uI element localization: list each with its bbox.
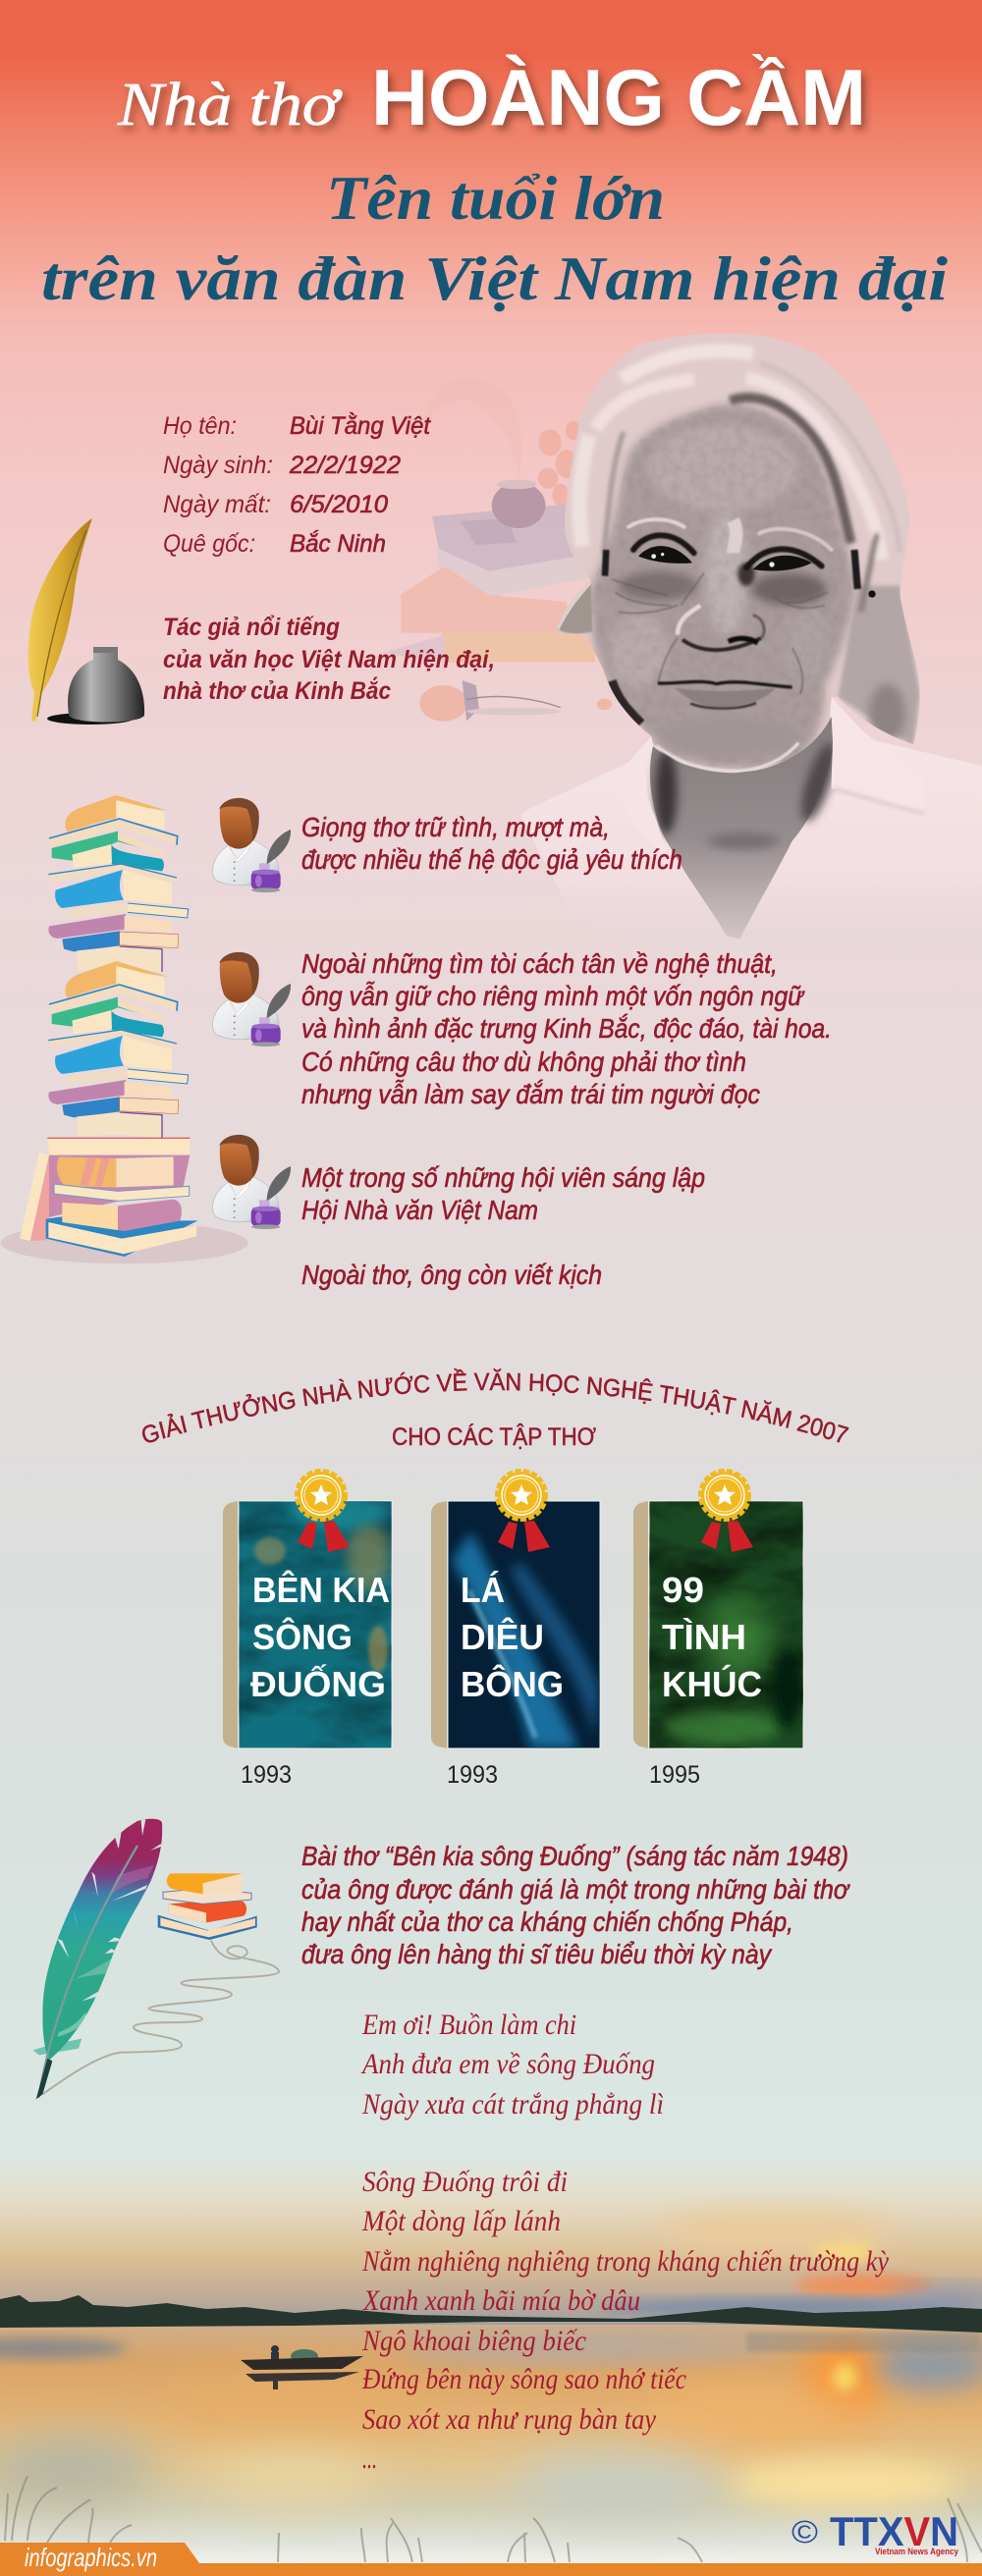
biography facts [163, 411, 431, 558]
title: HOÀNG CẦM [371, 53, 866, 142]
icon: writer 1 [212, 798, 291, 892]
collar [619, 699, 925, 854]
publication years: 1993 [241, 1761, 292, 1789]
TTXVN logo: TTXVN [830, 2508, 958, 2554]
footer bar with site tab: infographics.vn [25, 2543, 157, 2572]
beard and chin [612, 680, 798, 771]
squiggle line [42, 1941, 279, 2094]
publication years [241, 1761, 700, 1789]
text: artistic innovation: Ngoài những tìm tòi cách tân về nghệ thuật, [301, 948, 778, 979]
mouth [658, 681, 792, 709]
biography facts: Ngày sinh: [163, 452, 273, 479]
book: Lá diêu bông: LÁ [461, 1570, 505, 1610]
subtitle: Tên tuổi lớn [326, 163, 665, 233]
sunset lake photo [0, 2150, 982, 2576]
paragraph about the poem: của ông được đánh giá là một trong những bài thơ [301, 1874, 850, 1905]
book: Bên kia sông Đuống: ĐUỐNG [250, 1663, 386, 1704]
poem excerpt [360, 2009, 890, 2475]
ear [558, 582, 592, 633]
feather [32, 1816, 170, 2099]
icon: writer 2 [212, 952, 291, 1046]
biography facts: 22/2/1922 [289, 452, 401, 479]
poem excerpt: Một dòng lấp lánh [361, 2205, 561, 2237]
paragraph about the poem [301, 1841, 850, 1969]
illustration: tall pile of books [1, 795, 248, 1263]
text: founding member and playwright: Một trong số những hội viên sáng lập [301, 1162, 705, 1193]
book: Bên kia sông Đuống: BÊN KIA [252, 1569, 390, 1610]
tagline [163, 614, 495, 705]
poem excerpt: Anh đưa em về sông Đuống [360, 2048, 655, 2080]
text: founding member and playwright: Ngoài thơ, ông còn viết kịch [301, 1260, 602, 1290]
book: Lá diêu bông [431, 1501, 600, 1748]
tagline: nhà thơ của Kinh Bắc [163, 676, 391, 705]
title: Nhà thơ [117, 72, 343, 138]
paragraph about the poem: đưa ông lên hàng thi sĩ tiêu biểu thời kỳ này [301, 1939, 773, 1969]
TTXVN logo: © [791, 2514, 818, 2549]
tree line [0, 2295, 982, 2333]
poem excerpt: Em ơi! Buồn làm chi [361, 2009, 576, 2041]
book: Bên kia sông Đuống [223, 1494, 392, 1748]
footer bar with site tab [0, 2543, 982, 2576]
poem excerpt: ... [362, 2442, 377, 2475]
icon: gold quill [28, 518, 92, 722]
text: lyrical voice [301, 812, 682, 875]
book: Lá diêu bông: BÔNG [461, 1663, 564, 1704]
biography facts: Bùi Tằng Việt [290, 411, 431, 440]
text: lyrical voice: được nhiều thế hệ độc giả yêu thích [301, 844, 682, 875]
biography facts: 6/5/2010 [290, 491, 388, 518]
book: 99 tình khúc [633, 1501, 803, 1748]
text: artistic innovation: ông vẫn giữ cho riêng mình một vốn ngôn ngữ [301, 981, 805, 1011]
poem excerpt: Xanh xanh bãi mía bờ dâu [362, 2284, 640, 2317]
eye shadows [619, 571, 697, 601]
nose [678, 520, 764, 650]
text: founding member and playwright [301, 1162, 705, 1290]
faded still-life decoration: feather, pot, books, rose [382, 379, 612, 722]
publication years: 1993 [447, 1761, 498, 1789]
neck [650, 717, 843, 939]
biography facts: Họ tên: [163, 412, 237, 440]
medal 2 [498, 1472, 550, 1552]
head and hair [550, 324, 930, 782]
eyes [638, 546, 812, 571]
text: artistic innovation: và hình ảnh đặc trưng Kinh Bắc, độc đáo, tài hoa. [301, 1013, 832, 1044]
poem excerpt: Nằm nghiêng nghiêng trong kháng chiến trường kỳ [361, 2245, 890, 2278]
text: artistic innovation [301, 948, 832, 1109]
wrinkles [612, 572, 828, 694]
text: artistic innovation: nhưng vẫn làm say đắm trái tim người đọc [301, 1079, 760, 1109]
boat [241, 2345, 363, 2389]
portrait of Hoàng Cầm [520, 324, 982, 965]
poem excerpt: Ngày xưa cát trắng phẳng lì [361, 2088, 664, 2120]
illustration: colourful quill with books [32, 1816, 279, 2099]
paragraph about the poem: hay nhất của thơ ca kháng chiến chống Pháp, [301, 1906, 793, 1937]
subtitle: trên văn đàn Việt Nam hiện đại [41, 243, 948, 313]
book: Bên kia sông Đuống: SÔNG [252, 1616, 353, 1657]
poem excerpt: Sao xót xa như rụng bàn tay [362, 2403, 657, 2436]
medal 1 [298, 1472, 350, 1552]
eyebrows [628, 519, 832, 567]
poem excerpt: Sông Đuống trôi đi [362, 2166, 568, 2198]
tagline: Tác giả nổi tiếng [163, 614, 340, 641]
award heading: CHO CÁC TẬP THƠ [392, 1422, 596, 1451]
poem excerpt: Đứng bên này sông sao nhớ tiếc [361, 2363, 686, 2395]
skin texture [589, 402, 857, 773]
paragraph about the poem: Bài thơ “Bên kia sông Đuống” (sáng tác năm 1948) [301, 1841, 848, 1871]
book: 99 tình khúc: 99 [662, 1570, 704, 1610]
publication years: 1995 [649, 1761, 700, 1789]
book: 99 tình khúc: KHÚC [662, 1663, 762, 1704]
book: Lá diêu bông: DIÊU [461, 1616, 544, 1657]
subtitle [41, 163, 948, 313]
text: founding member and playwright: Hội Nhà văn Việt Nam [301, 1195, 538, 1225]
hair strands [579, 351, 900, 612]
shirt [520, 697, 982, 965]
biography facts: Bắc Ninh [290, 529, 386, 558]
biography facts: Ngày mất: [163, 491, 271, 518]
medal 3 [701, 1472, 753, 1552]
text: artistic innovation: Có những câu thơ dù không phải thơ tình [301, 1046, 746, 1077]
award heading: GIẢI THƯỞNG NHÀ NƯỚC VỀ VĂN HỌC NGHỆ THUẬT NĂM 2007 [141, 1368, 848, 1443]
text: lyrical voice: Giọng thơ trữ tình, mượt mà, [301, 812, 610, 842]
small book pile [158, 1873, 257, 1940]
TTXVN logo: Vietnam News Agency [875, 2547, 958, 2556]
icon: ink bottle [47, 647, 144, 724]
book: 99 tình khúc: TÌNH [662, 1617, 746, 1657]
title [117, 53, 866, 142]
poem excerpt: Ngô khoai biêng biếc [361, 2325, 586, 2357]
icon: writer 3 [212, 1135, 291, 1229]
reeds in the foreground [5, 2476, 982, 2562]
tagline: của văn học Việt Nam hiện đại, [163, 646, 495, 673]
biography facts: Quê gốc: [163, 530, 255, 558]
